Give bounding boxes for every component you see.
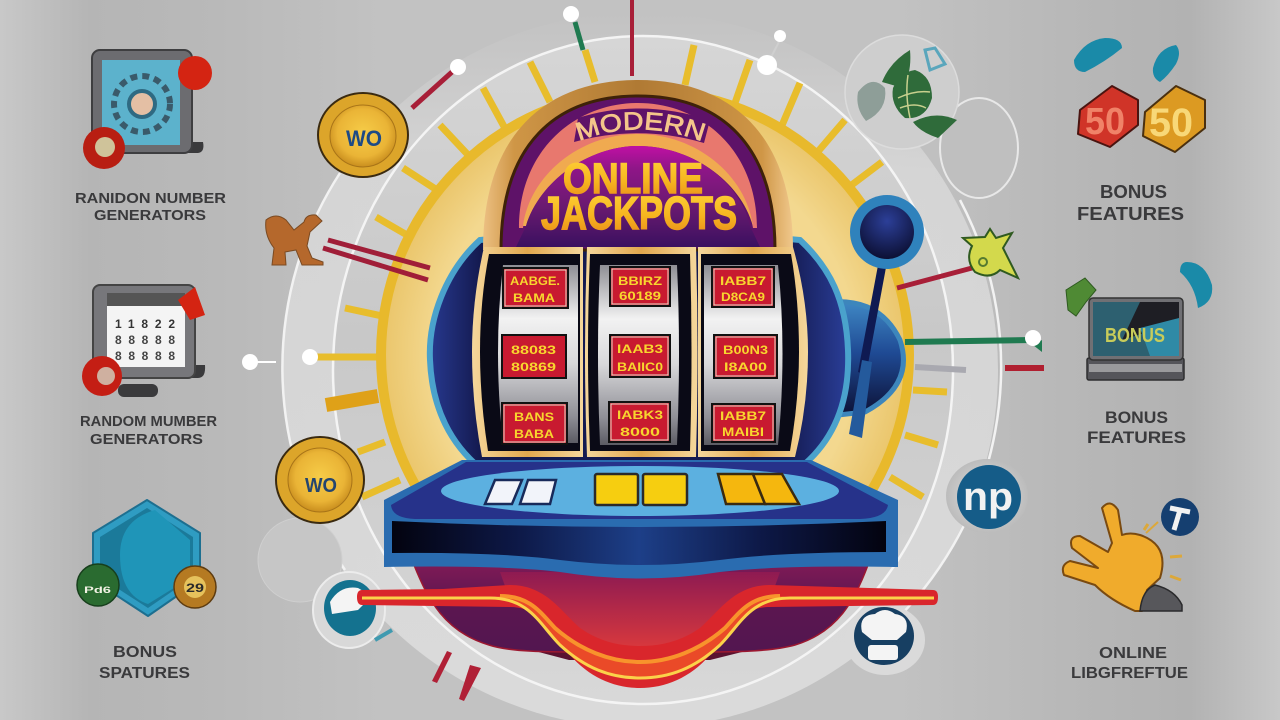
reel 3: IABB7 (720, 409, 766, 423)
reel 3: MAIBI (722, 425, 764, 439)
lower belly (357, 565, 938, 688)
label (99, 644, 190, 682)
decorative bubble lower left (258, 518, 342, 602)
title: online: ONLINE (563, 155, 703, 203)
pointer lines and dots (242, 0, 1044, 370)
reel 1: BABA (514, 427, 554, 441)
reel 1 (472, 247, 583, 457)
item: bonus features 1 (1074, 38, 1205, 224)
icon: bottom-left badge (313, 572, 392, 648)
title: modern: MODERN (575, 112, 706, 141)
label: ONLINE (1099, 645, 1167, 662)
reel 1: BAMA (513, 291, 555, 305)
label: SPATURES (99, 665, 190, 682)
item: bonus spatures (77, 500, 216, 682)
label (80, 414, 218, 448)
item: random number generators 2 (80, 285, 218, 448)
sunburst disc (381, 91, 909, 619)
icon: green horned creature (963, 229, 1018, 278)
label (1077, 182, 1184, 224)
lever (849, 195, 924, 438)
icon: monitor with blue screen (83, 50, 212, 169)
reel 2: 8000 (620, 425, 660, 439)
reel 1: AABGE. (510, 274, 560, 288)
orange buttons (718, 474, 799, 504)
icon: golden hand with lever (1063, 498, 1199, 611)
icon: monitor with number grid: 11822 (115, 317, 175, 331)
coin lower left (276, 437, 364, 523)
reel 3: I8A00 (724, 360, 767, 374)
bubble with leaves (845, 35, 1018, 198)
reel 2: IABK3 (617, 408, 663, 422)
label: GENERATORS (90, 432, 203, 448)
label (1071, 645, 1188, 682)
label (75, 190, 226, 224)
label: FEATURES (1077, 204, 1184, 224)
label: BONUS (113, 644, 177, 661)
icon: np badge: np (963, 475, 1013, 519)
icon: 50 blocks (1074, 38, 1205, 152)
icon: 50 blocks: 50 (1085, 101, 1125, 143)
lever hub (830, 302, 903, 416)
reel 2: BBIRZ (618, 274, 662, 288)
icon: monitor with number grid (82, 285, 205, 397)
item: bonus features 2 (1066, 262, 1212, 447)
label (1087, 408, 1186, 447)
icon: laptop with bonus screen (1066, 262, 1212, 380)
icon: monitor with number grid: 88888 (115, 349, 175, 363)
rays around sunburst (317, 45, 947, 497)
item: online libgfreftue (1063, 498, 1199, 682)
icon: dog figure (266, 215, 323, 265)
icon: teal hexagon shield (77, 500, 216, 616)
reel 2: 60189 (619, 289, 661, 303)
slot machine (357, 80, 938, 688)
label: BONUS (1105, 408, 1168, 427)
reel 1: BANS (514, 410, 554, 424)
item: random number generators 1 (75, 50, 226, 224)
reel 3: D8CA9 (721, 290, 765, 304)
icon: laptop with bonus screen: BONUS (1105, 325, 1165, 347)
red slanted bars bottom (432, 651, 481, 701)
label: GENERATORS (94, 207, 206, 224)
reel 1: 88083 (511, 343, 556, 357)
yellow buttons (595, 474, 687, 505)
reel 1: 80869 (511, 360, 556, 374)
cabinet (430, 232, 848, 468)
icon: teal hexagon shield: Pd6 (84, 585, 111, 595)
base console (384, 460, 898, 578)
label: RANDOM MUMBER (80, 414, 218, 430)
marquee arch (483, 80, 793, 252)
reel 2 (585, 247, 698, 457)
title: jackpots: JACKPOTS (541, 187, 737, 239)
label: RANIDON NUMBER (75, 190, 226, 207)
reel 3: IABB7 (720, 274, 766, 288)
reel 3 (698, 247, 808, 457)
outer ring band (282, 12, 1001, 720)
icon: np badge (946, 459, 1028, 533)
icon: 50 blocks: 50 (1149, 101, 1193, 145)
reel 2: IAAB3 (617, 342, 663, 356)
icon: teal hexagon shield: 29 (186, 581, 204, 595)
coin lower left: WO (305, 475, 337, 497)
white buttons (485, 480, 556, 504)
icon: monitor with number grid: 88888 (115, 333, 175, 347)
reel 2: BAIIC0 (617, 360, 663, 374)
coin top left: WO (346, 126, 382, 151)
label: LIBGFREFTUE (1071, 665, 1188, 682)
label: BONUS (1100, 182, 1167, 202)
icon: chef hat badge (845, 605, 925, 675)
reel 3: B00N3 (723, 343, 768, 357)
coin top left (318, 93, 408, 177)
red swoosh (357, 585, 938, 688)
label: FEATURES (1087, 428, 1186, 447)
